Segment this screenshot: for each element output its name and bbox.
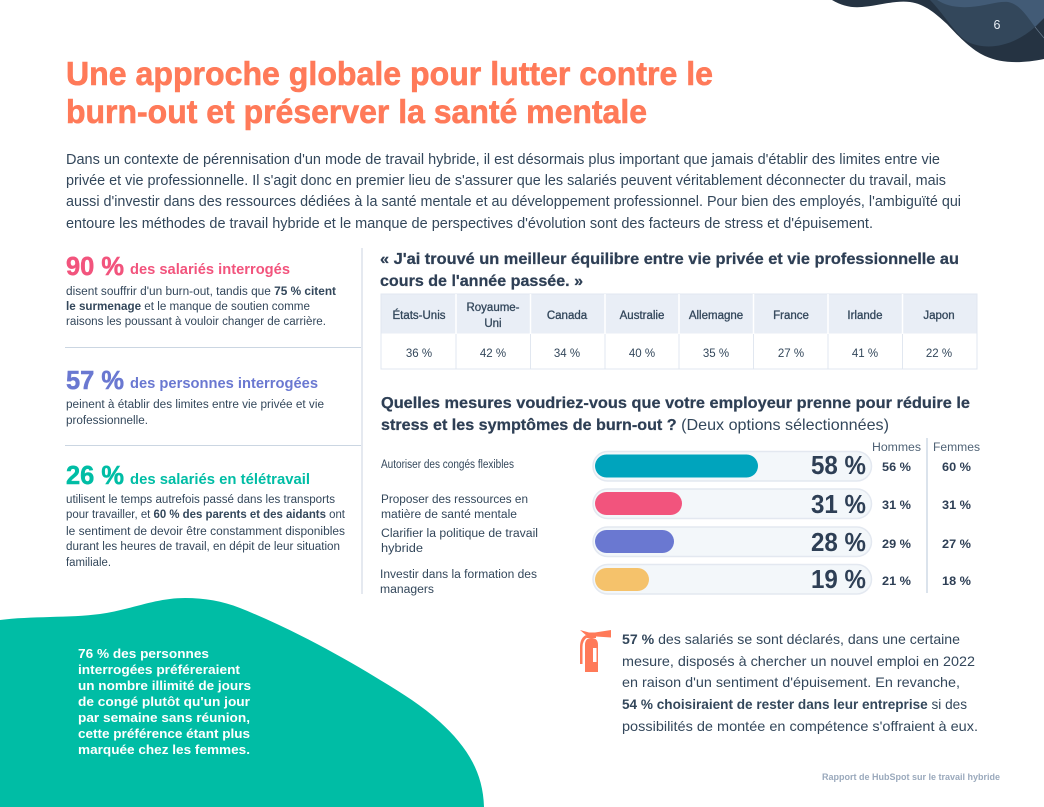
bar row: santé mentale: Proposer des ressources en (381, 494, 528, 506)
country table: Irlande (847, 310, 883, 322)
right callout text (622, 631, 978, 734)
country table: Allemagne (689, 310, 743, 322)
green blob callout: 76 % des personnes (78, 646, 209, 661)
green blob callout: un nombre illimité de jours (78, 678, 251, 693)
bar row: politique de travail hybride: hybride (381, 543, 423, 555)
bar row: santé mentale: 31 % (811, 489, 866, 519)
bar row: formation des managers (380, 564, 971, 596)
quote heading: « J'ai trouvé un meilleur équilibre entre vie privée et vie professionnelle au (380, 251, 959, 268)
country table: 41 % (852, 348, 878, 360)
survey question heading: stress et les symptômes de burn-out ? (Deux options sélectionnées) (381, 417, 889, 434)
right callout text: en raison d'un sentiment d'épuisement. En revanche, (622, 674, 960, 690)
stat: 90 %: 90 % (66, 251, 124, 281)
stat: 90 %: disent souffrir d'un burn-out, tandis que 75 % citent (66, 286, 336, 298)
country table: États-Unis (392, 309, 446, 322)
stat: 57 %: professionnelle. (66, 415, 148, 427)
intro paragraph: privée et vie professionnelle. Il s'agit donc en premier lieu de s'assurer que les salariés peuvent véritablement déconnecter du travail, mais (66, 173, 946, 189)
green blob callout: interrogées préféreraient (78, 662, 241, 677)
stat: 57 %: 57 % (66, 365, 124, 395)
bar row: politique de travail hybride: 27 % (942, 539, 971, 551)
intro paragraph: Dans un contexte de pérennisation d'un mode de travail hybride, il est désormais plus important que jamais d'établir des limites entre vie (66, 152, 940, 168)
stat: 26 %: familiale. (66, 557, 111, 569)
bar row: formation des managers: managers (380, 584, 434, 596)
bar row: santé mentale: 31 % (942, 500, 971, 512)
title: burn-out et préserver la santé mentale (66, 93, 647, 130)
green blob callout: marquée chez les femmes. (78, 742, 250, 757)
country table: 22 % (926, 348, 952, 360)
country table: 40 % (629, 348, 655, 360)
right callout text: possibilités de montée en compétence s'offraient à eux. (622, 718, 978, 734)
column headers: Hommes / Femmes (872, 442, 980, 454)
stat: 26 % (66, 460, 346, 569)
right callout text: mesure, disposés à chercher un nouvel emploi en 2022 (622, 653, 975, 669)
bar row: formation des managers: 21 % (882, 576, 911, 588)
bar row: congés flexibles (381, 450, 971, 481)
corner wave decoration with page number (832, 0, 1044, 62)
bar row: santé mentale (381, 489, 971, 521)
country table: 27 % (778, 348, 804, 360)
bar row: politique de travail hybride: 29 % (882, 539, 911, 551)
bar row: santé mentale: 31 % (882, 500, 911, 512)
stat: 90 %: des salariés interrogés (130, 262, 290, 278)
stat: 26 %: 26 % (66, 460, 124, 490)
country table: 35 % (703, 348, 729, 360)
stat: 90 %: raisons les poussant à vouloir changer de carrière. (66, 316, 326, 328)
stat: 57 %: peinent à établir des limites entre vie privée et vie (66, 399, 324, 411)
stat: 57 % (66, 365, 324, 427)
bar row: formation des managers: Investir dans la formation des (380, 569, 537, 581)
bar row: politique de travail hybride: Clarifier la politique de travail (381, 528, 538, 540)
icon: fire extinguisher (580, 630, 611, 672)
country table: Australie (620, 310, 664, 322)
country table: France (773, 310, 809, 322)
title (66, 55, 713, 130)
green blob callout: par semaine sans réunion, (78, 710, 250, 725)
title: Une approche globale pour lutter contre le (66, 55, 713, 92)
survey question heading: Quelles mesures voudriez-vous que votre employeur prenne pour réduire le (381, 395, 970, 412)
green blob callout (0, 598, 484, 807)
right callout text: 57 % des salariés se sont déclarés, dans une certaine (622, 631, 960, 647)
intro paragraph: entoure les méthodes de travail hybride et le manque de perspectives d'évolution sont des facteurs de stress et d'épuisement. (66, 216, 873, 232)
country table: Royaume- (466, 302, 520, 314)
country table: 36 % (406, 348, 432, 360)
bar row: formation des managers: 18 % (942, 576, 971, 588)
stat: 26 %: des salariés en télétravail (130, 472, 310, 488)
quote heading: cours de l'année passée. » (380, 273, 583, 290)
intro paragraph (66, 152, 961, 232)
stat: 26 %: pour travailler, et 60 % des parents et des aidants ont (66, 509, 346, 521)
country table (381, 294, 977, 369)
stat: 26 %: le sentiment de devoir être constamment disponibles (66, 526, 345, 538)
survey question heading (381, 395, 970, 434)
stat: 26 %: utilisent le temps autrefois passé dans les transports (66, 494, 335, 506)
stat: 26 %: durant les heures de travail, en dépit de leur situation (66, 541, 340, 553)
stat: 57 %: des personnes interrogées (130, 376, 318, 392)
country table: Canada (547, 310, 588, 322)
stat: 90 %: le surmenage et le manque de soutien comme (66, 301, 310, 313)
bar row: congés flexibles: Autoriser des congés flexibles (381, 459, 514, 471)
column headers: Hommes / Femmes: Femmes (933, 442, 980, 454)
bar row: politique de travail hybride: 28 % (811, 527, 866, 557)
country table: 42 % (480, 348, 506, 360)
page number: 6 (994, 18, 1001, 32)
bar row: santé mentale: matière de santé mentale (381, 509, 517, 521)
bar row: congés flexibles: 56 % (882, 462, 911, 474)
bar row: politique de travail hybride (381, 527, 971, 557)
bar row: congés flexibles: 60 % (942, 462, 971, 474)
column headers: Hommes / Femmes: Hommes (872, 442, 921, 454)
country table: 34 % (554, 348, 580, 360)
footer: Rapport de HubSpot sur le travail hybride (822, 772, 1000, 782)
stat: 90 % (66, 251, 336, 328)
country table: Uni (484, 318, 502, 330)
bar row: congés flexibles: 58 % (811, 450, 866, 480)
quote heading (380, 251, 959, 290)
bar row: formation des managers: 19 % (811, 564, 866, 594)
country table: Japon (923, 310, 955, 322)
green blob callout: de congé plutôt qu'un jour (78, 694, 250, 709)
right callout text: 54 % choisiraient de rester dans leur entreprise si des (622, 696, 967, 712)
intro paragraph: aussi d'investir dans des ressources dédiées à la santé mentale et au développement professionnel. Pour bien des employés, l'ambiguïté qui (66, 194, 961, 210)
green blob callout: cette préférence étant plus (78, 726, 250, 741)
